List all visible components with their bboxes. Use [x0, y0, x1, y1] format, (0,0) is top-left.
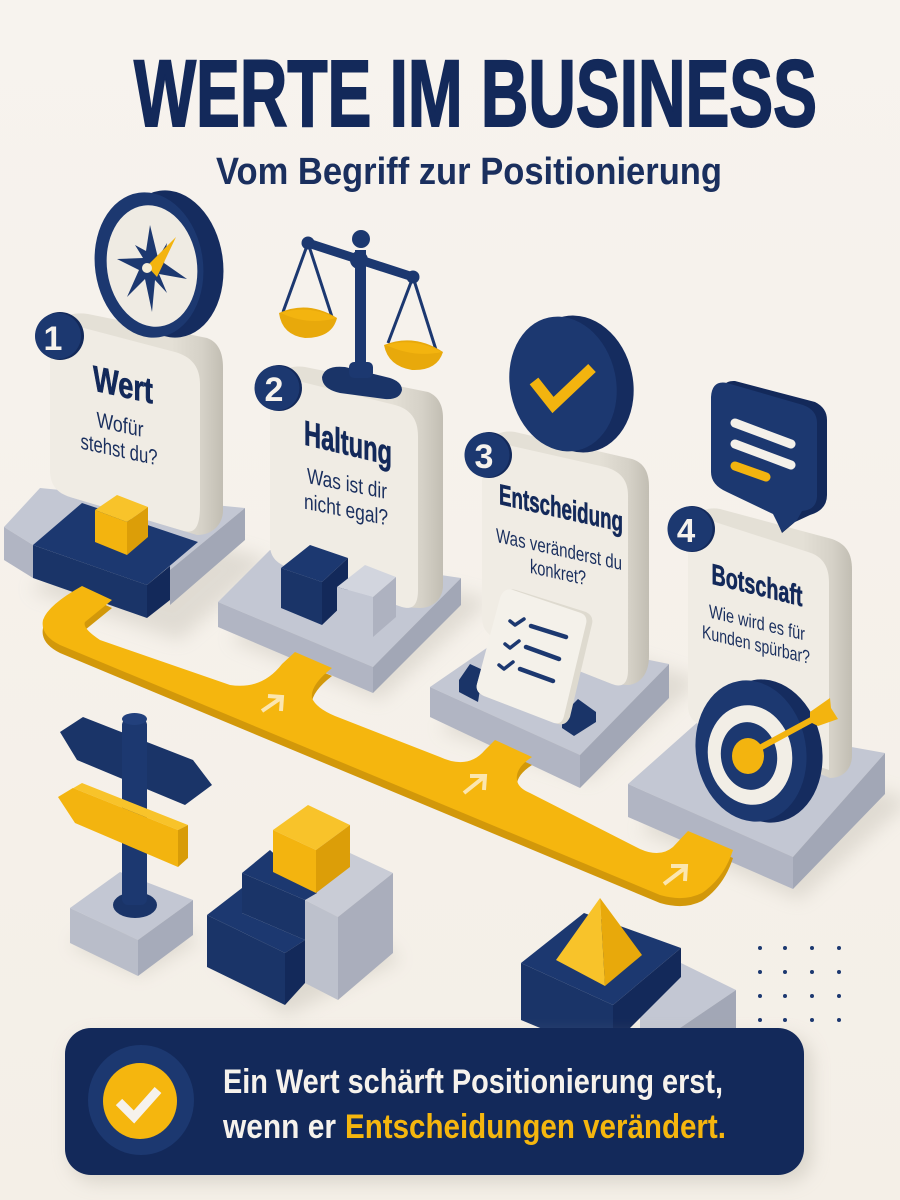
number badge 1: 1 [44, 320, 62, 358]
grey base 2 [218, 550, 461, 693]
grey base 1 [4, 488, 245, 605]
grey cube [337, 565, 396, 637]
navy sign [60, 717, 212, 805]
gold pyramid [556, 898, 642, 986]
card 4 question: Kunden spürbar? [702, 622, 810, 669]
step 4 panel: Botschaft [628, 381, 900, 900]
gold sign [58, 783, 188, 867]
dot grid [758, 946, 841, 1022]
icon: target with arrow [685, 670, 838, 832]
callout text [222, 1063, 726, 1146]
icon: speech bubble [711, 381, 827, 533]
gold cube top [273, 805, 350, 893]
post [113, 713, 157, 918]
arrow 2 on path [464, 776, 485, 793]
grey block behind [640, 963, 736, 1028]
callout text: Entscheidungen verändert. [345, 1108, 726, 1146]
icon: scales [279, 230, 443, 399]
icon: check badge [88, 1045, 194, 1155]
icon: checklist [459, 589, 596, 736]
icon: signpost [58, 713, 212, 976]
card 2 question: nicht egal? [304, 489, 388, 530]
card 1 [50, 313, 223, 535]
card 1 question [80, 407, 158, 470]
step 2 panel: Haltung [218, 230, 490, 700]
card 2 question: Was ist dir [307, 463, 387, 504]
navy blocks [207, 850, 317, 1005]
grey base 3 [430, 632, 669, 788]
card 3 question: Was veränderst du [496, 525, 622, 575]
card 3 [482, 432, 649, 685]
navy cube [281, 545, 348, 625]
card 4 question [702, 602, 810, 669]
gold cube [95, 495, 148, 555]
grey tall block [305, 853, 393, 1000]
signpost base [70, 872, 193, 976]
callout text: wenn er [222, 1108, 336, 1146]
number badge 4 [668, 506, 715, 552]
subtitle: Vom Begriff zur Positionierung [216, 151, 722, 193]
number badge 3: 3 [475, 438, 493, 476]
card 3 question: konkret? [530, 556, 586, 590]
grey base 4 [628, 720, 885, 889]
card 4 [688, 508, 852, 778]
number badge 4: 4 [677, 512, 696, 549]
stacked cubes [207, 805, 400, 1015]
card 4 question: Wie wird es für [709, 602, 805, 646]
arrow 3 on path [664, 866, 686, 884]
step 1 panel: Wert [4, 183, 270, 640]
number badge 3 [464, 432, 512, 478]
card 2 [270, 367, 443, 608]
callout banner [65, 1028, 812, 1182]
number badge 2: 2 [265, 371, 283, 409]
icon: check disc [497, 305, 646, 463]
navy block [521, 913, 681, 1030]
number badge 2 [254, 365, 302, 411]
card 1 heading: Wert [93, 358, 153, 412]
step 3 panel: Entscheidung [430, 305, 700, 788]
card 2 heading: Haltung [304, 413, 392, 473]
number badge 1 [35, 312, 84, 360]
card 3 heading: Entscheidung [499, 478, 623, 539]
callout text: Ein Wert schärft Positionierung erst, [223, 1063, 723, 1101]
card 2 question [304, 463, 388, 530]
navy plate [33, 503, 198, 618]
card 1 question: stehst du? [80, 429, 158, 470]
arrow 1 on path [262, 696, 282, 711]
card 1 question: Wofür [96, 407, 144, 442]
pyramid on blocks [521, 898, 736, 1030]
card 4 heading: Botschaft [712, 558, 803, 613]
icon: compass [85, 183, 233, 345]
yellow path connecting the steps [43, 586, 733, 906]
